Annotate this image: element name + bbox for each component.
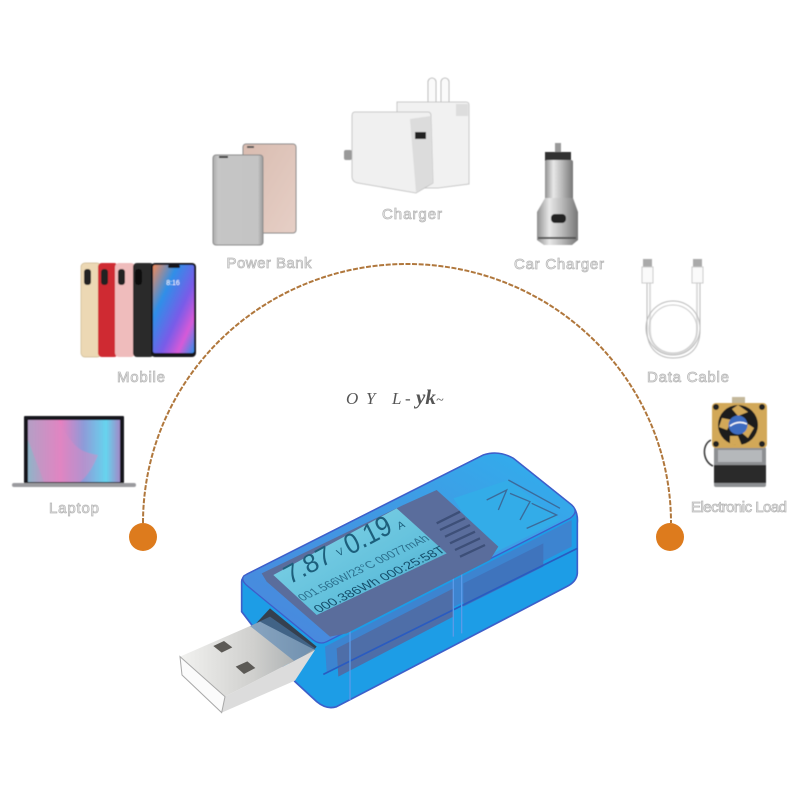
watermark: - [405,389,411,408]
left orange dot [129,523,157,551]
icon: car charger [537,143,578,245]
inner electronics shading [337,588,453,677]
label: Laptop: Laptop [49,500,99,517]
plug front opening [180,657,225,713]
lower band side shading [325,520,572,672]
label: Charger: Charger [382,206,442,223]
label: Car Charger: Car Charger [514,256,604,273]
spring [437,512,485,557]
lower seam [323,548,577,674]
plug side lip [222,650,315,713]
LCD readings [279,510,449,615]
body silhouette [242,453,577,708]
voltage: 7.87 [279,541,337,590]
plug tint under body [250,617,315,662]
port teeth [487,480,560,528]
icon: mobile phones: 8:16 [166,280,180,287]
top face [243,453,575,643]
watermark: Y [366,389,377,408]
label: Power Bank: Power Bank [226,255,312,272]
icon: data cable [642,259,703,358]
LCD screen [273,508,447,615]
icon: charger [344,78,469,193]
label: Mobile: Mobile [117,369,165,386]
power temp capacity line: 001.566W/23°C 00077mAh [295,532,432,603]
icon: power bank [213,144,296,245]
energy time line: 000.386Wh 000:25:58T [311,544,449,615]
A unit: A [395,518,408,533]
dashed arc connecting the two dots [143,264,671,523]
plug top face [180,622,315,697]
icon: laptop [12,416,136,487]
watermark: yk [413,385,436,409]
icon: mobile phones [81,263,196,357]
current: 0.19 [339,510,397,562]
label: Data Cable: Data Cable [647,369,729,386]
label: Electronic Load: Electronic Load [691,499,787,516]
port window [453,480,561,555]
watermark: O [346,389,358,408]
screen carrier [262,490,498,637]
icon: electronic load [704,397,767,487]
watermark: L [391,389,401,408]
right orange dot [656,523,684,551]
watermark: ~ [436,393,444,408]
USB tester device [180,453,577,713]
plug holes [213,641,255,674]
USB connector dark throat [250,608,317,670]
V unit: V [335,546,346,559]
